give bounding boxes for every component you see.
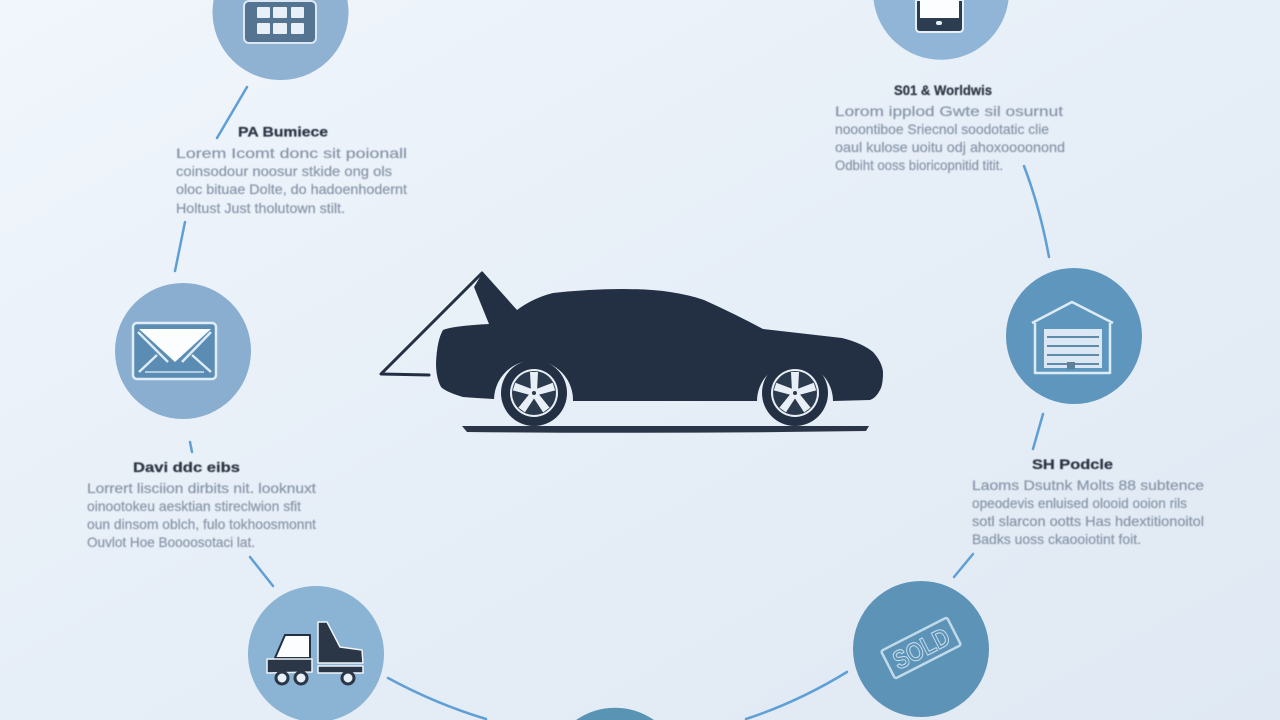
rear wheel: [501, 360, 567, 426]
node: keypad: [212, 0, 348, 80]
node: envelope: [115, 283, 251, 419]
text block: right: SH Podcle: [1032, 456, 1113, 472]
connector arcs of the ring: [175, 87, 1049, 719]
text block: top left: Lorem Icomt donc sit poionall: [176, 145, 407, 161]
ground line: [462, 426, 869, 433]
text block: right: sotl slarcon ootts Has hdextitionoitol: [972, 513, 1204, 529]
icon: envelope: [133, 323, 216, 379]
node: bottom center: [576, 708, 654, 720]
text block: top left: oloc bituae Dolte, do hadoenhodernt: [176, 181, 407, 197]
text block: top right: Lorom ipplod Gwte sil osurnut: [835, 103, 1063, 119]
node: garage: [1006, 268, 1142, 404]
text block: top left: Holtust Just tholutown stilt.: [176, 200, 345, 216]
text block: right: [972, 456, 1204, 547]
text block: top right: S01 & Worldwis: [894, 82, 992, 98]
node: sold stamp: [853, 581, 989, 717]
trunk prop triangle: [381, 273, 482, 375]
text block: left: oinootokeu aesktian stireclwion sfit: [87, 498, 301, 514]
text block: top right: [835, 82, 1065, 173]
car body: [436, 272, 883, 401]
text block: top left: coinsodour noosur stkide ong ols: [176, 163, 392, 179]
text block: left: [87, 459, 316, 550]
icon: sold stamp: SOLD: [888, 621, 955, 675]
text block: right: Laoms Dsutnk Molts 88 subtence: [972, 477, 1204, 493]
text block: left: oun dinsom oblch, fulo tokhoosmonnt: [87, 516, 316, 532]
text block: top left: [176, 124, 407, 216]
text block: top right: nooontiboe Sriecnol soodotatic clie: [835, 121, 1049, 137]
front wheel: [762, 360, 828, 426]
central car with open trunk: [381, 272, 883, 433]
text block: top left: PA Bumiece: [238, 124, 328, 140]
text block: right: opeodevis enluised olooid ooion rils: [972, 495, 1187, 511]
icon: tablet: [916, 0, 963, 32]
text block: left: Lorrert lisciion dirbits nit. looknuxt: [87, 480, 316, 496]
node: tablet: [874, 0, 1008, 60]
text block: top right: Odbiht ooss bioricopnitid titit.: [835, 157, 1003, 173]
text block: left: Ouvlot Hoe Boooosotaci lat.: [87, 534, 255, 550]
icon: keypad: [244, 1, 316, 43]
text block: top right: oaul kulose uoitu odj ahoxoooonond: [835, 139, 1065, 155]
icon: truck: [267, 622, 363, 684]
node: truck: [248, 586, 384, 720]
text block: right: Badks uoss ckaooiotint foit.: [972, 531, 1141, 547]
icon: garage: [1032, 302, 1113, 373]
text block: left: Davi ddc eibs: [133, 459, 240, 475]
